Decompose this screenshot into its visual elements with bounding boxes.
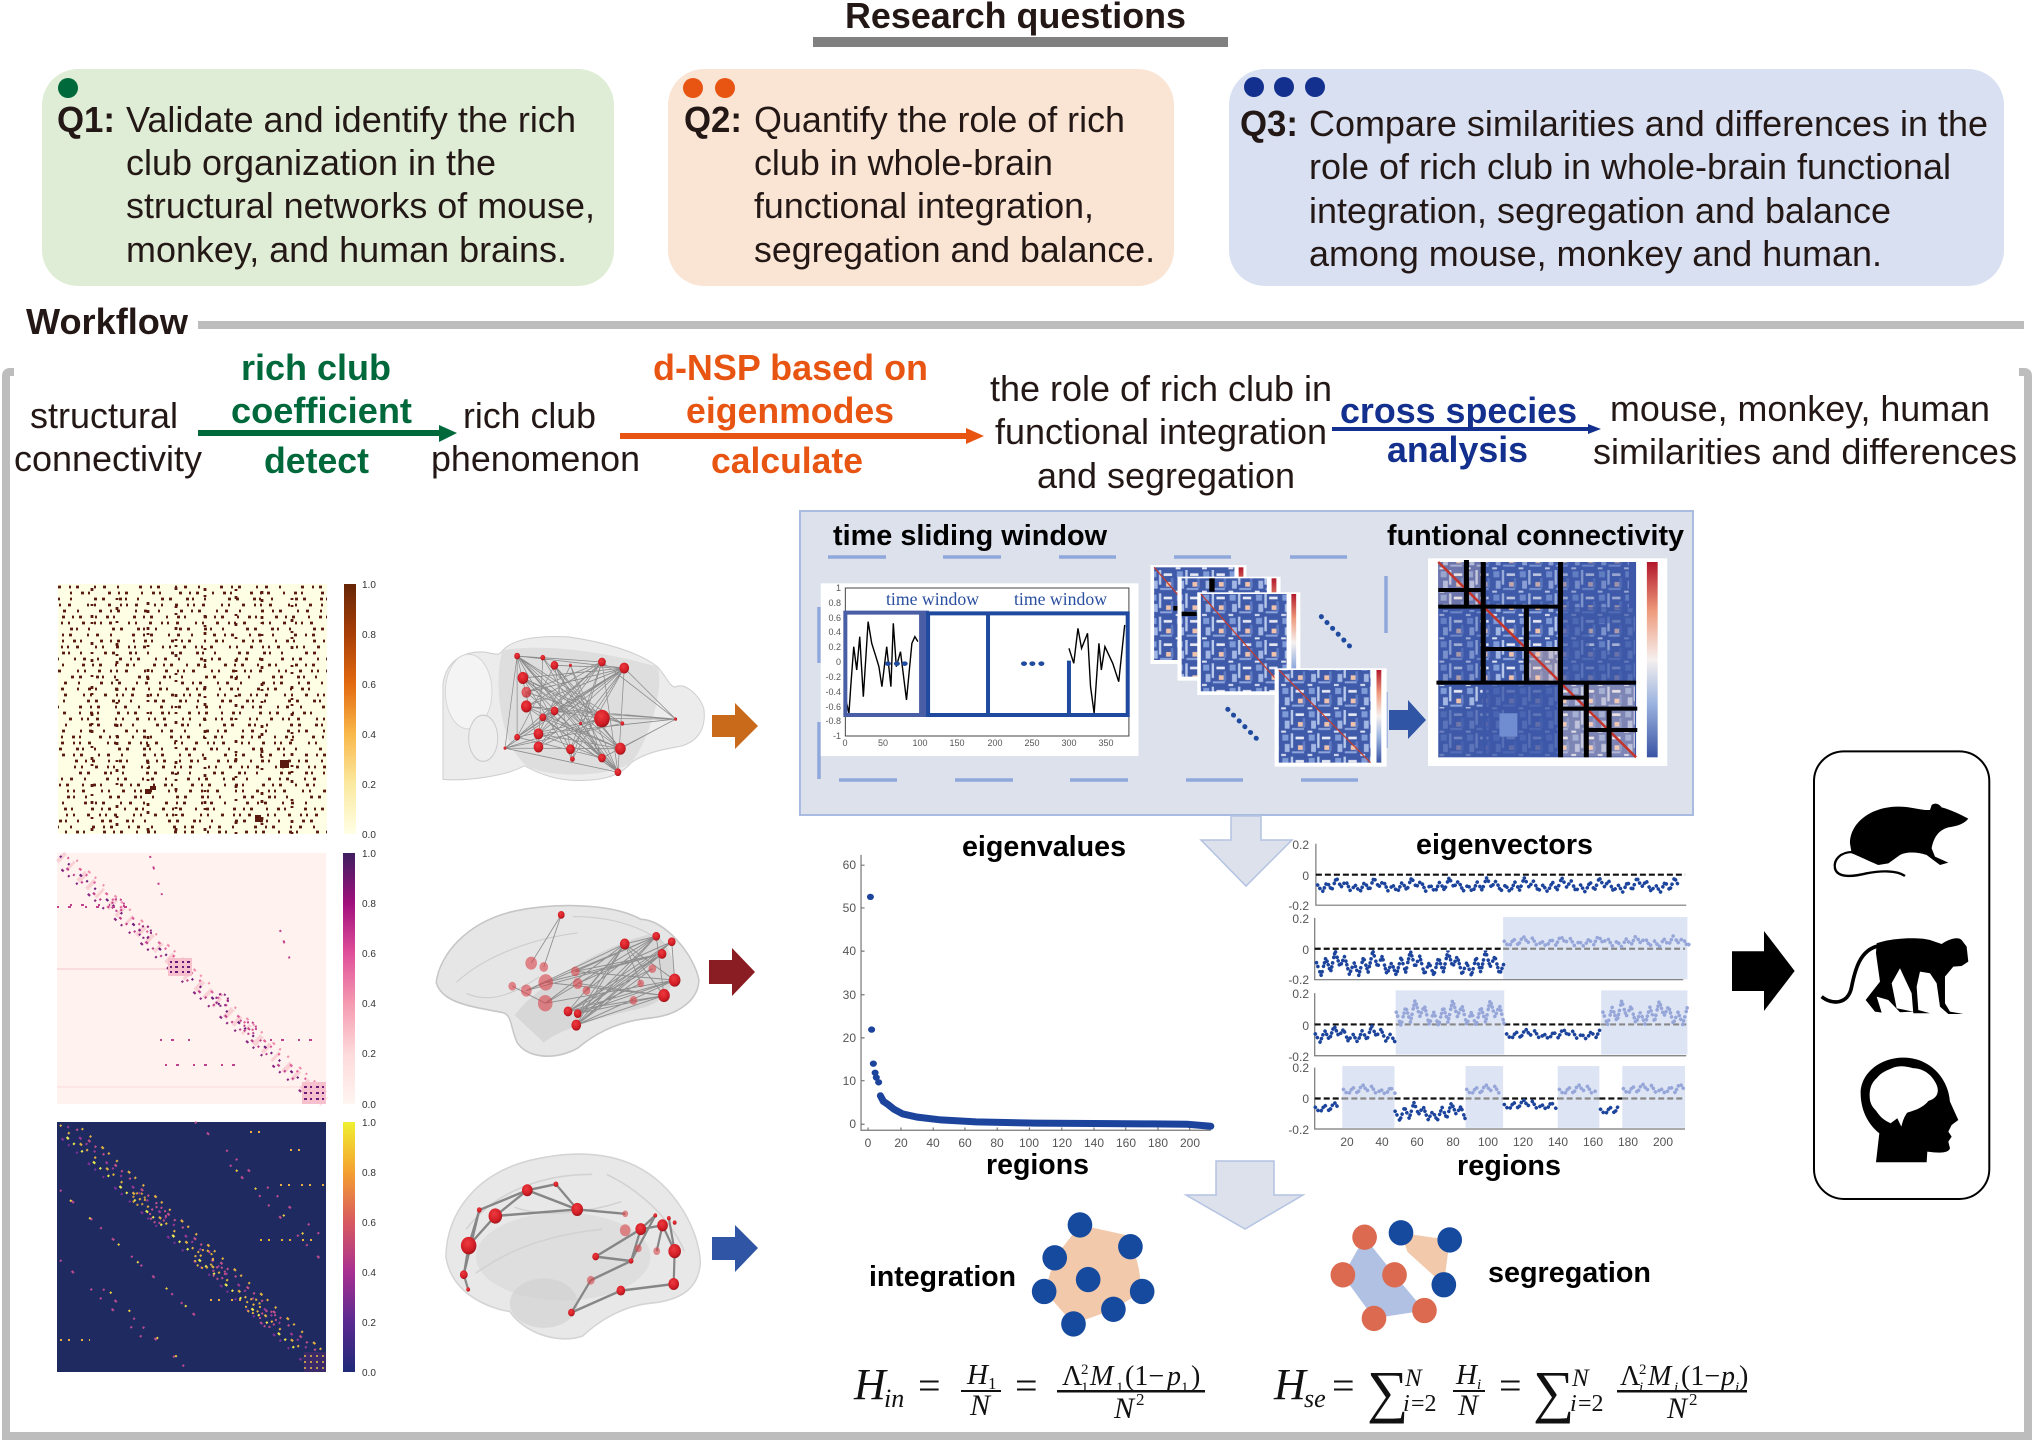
chart: eigenvalues: 100 xyxy=(1019,1136,1039,1150)
panel: Q2 xyxy=(668,69,1174,286)
diagram: integration xyxy=(869,1212,1154,1337)
panel: Q2: club in whole-brain xyxy=(754,142,1053,183)
formula: integration: M xyxy=(1089,1361,1115,1392)
chart: time series with windows: 0 xyxy=(842,738,848,748)
chart: eigenvectors: 40 xyxy=(1375,1135,1389,1149)
chart: time series with windows: 0.8 xyxy=(828,598,841,608)
chart: time series with windows: 150 xyxy=(949,738,965,748)
workflow step: similarities and differences xyxy=(1593,388,2017,472)
icon: monkey xyxy=(1822,938,1968,1014)
formula: segregation: =2 xyxy=(1411,1391,1437,1417)
chart: eigenvalues: 10 xyxy=(843,1074,856,1088)
workflow step: rich club phenomenon: rich club xyxy=(463,395,596,436)
chart: eigenvectors: -0.2 xyxy=(1288,973,1309,987)
formula: segregation: N xyxy=(1571,1365,1590,1392)
workflow step: role of rich club: the role of rich club in xyxy=(990,368,1332,409)
chart: eigenvectors: 0 xyxy=(1302,943,1309,957)
formula: integration: H xyxy=(853,1360,888,1409)
arrow: dark red xyxy=(709,948,755,996)
formula: segregation: = xyxy=(1499,1363,1522,1408)
formula: integration xyxy=(853,1359,1205,1425)
chart: time series with windows: 50 xyxy=(878,738,888,748)
formula: segregation: i xyxy=(1403,1391,1410,1417)
chart: eigenvectors: regions xyxy=(1457,1150,1561,1182)
panel: Q1 xyxy=(42,69,614,286)
formula: integration: 1 xyxy=(1081,1380,1088,1396)
chart: eigenvectors: -0.2 xyxy=(1288,1123,1309,1137)
formula: integration: H xyxy=(966,1359,990,1391)
formula: integration: (1− xyxy=(1125,1361,1164,1392)
chart: eigenvectors: 0.2 xyxy=(1292,912,1309,926)
chart: time series with windows: 0.6 xyxy=(828,613,841,623)
arrow: black to species xyxy=(1732,931,1795,1011)
heatmap: human structural connectivity: 0.6 xyxy=(362,1218,376,1229)
icon: human head with brain xyxy=(1861,1058,1958,1162)
chart: eigenvalues: 30 xyxy=(843,988,856,1002)
chart: eigenvalues: 0 xyxy=(849,1117,856,1131)
panel: Q2: Q2: xyxy=(684,99,742,140)
heading: functional connectivity: funtional connectivity xyxy=(1387,520,1684,552)
formula: integration: ) xyxy=(1191,1361,1200,1392)
heatmap: human structural connectivity: 0.4 xyxy=(362,1268,376,1279)
panel: Q3: integration, segregation and balance xyxy=(1309,190,1891,231)
chart: time series with windows: time window xyxy=(1014,589,1107,609)
heatmap: mouse structural connectivity: 0.8 xyxy=(362,630,376,641)
arrow: to functional connectivity xyxy=(1389,700,1426,739)
arrow: rich club coefficient detect: detect xyxy=(264,440,369,481)
chart: eigenvectors: 0 xyxy=(1302,1019,1309,1033)
brain: monkey network xyxy=(436,906,699,1056)
chart: eigenvalues: 0 xyxy=(865,1136,872,1150)
formula: integration: 2 xyxy=(1081,1362,1088,1378)
chart: eigenvalues: 180 xyxy=(1148,1136,1168,1150)
panel: Q1: structural networks of mouse, xyxy=(126,185,595,226)
arrow: cross species analysis: analysis xyxy=(1387,429,1528,470)
chart: eigenvalues: 160 xyxy=(1116,1136,1136,1150)
arrow: cross species analysis: cross species xyxy=(1340,390,1577,431)
panel: time sliding window and functional connectivity xyxy=(800,511,1693,815)
heatmap: mouse structural connectivity xyxy=(58,580,376,841)
formula: segregation: = xyxy=(1332,1363,1355,1408)
heatmap: monkey structural connectivity: 0.4 xyxy=(362,999,376,1010)
chart: eigenvectors xyxy=(1288,829,1692,1182)
workflow step: similarities and differences: similarities and differences xyxy=(1593,431,2017,472)
formula: segregation: i xyxy=(1477,1377,1481,1393)
chart: time series with windows: -0.4 xyxy=(825,687,841,697)
formula: integration: 1 xyxy=(1181,1380,1188,1396)
heatmap: human structural connectivity: 1.0 xyxy=(362,1118,376,1129)
formula: segregation: 2 xyxy=(1689,1390,1698,1409)
formula: integration: = xyxy=(918,1363,941,1408)
chart: eigenvectors: 20 xyxy=(1340,1135,1354,1149)
formula: segregation: ) xyxy=(1739,1361,1748,1392)
chart: time series with windows: 100 xyxy=(912,738,928,748)
chart: eigenvectors: 120 xyxy=(1513,1135,1533,1149)
chart: time series with windows: time window xyxy=(886,589,979,609)
chart: eigenvectors: eigenvectors xyxy=(1416,829,1593,861)
formula: segregation: M xyxy=(1647,1361,1673,1392)
formula: segregation: ∑ xyxy=(1533,1359,1574,1424)
formula: segregation: i xyxy=(1570,1391,1577,1417)
arrow: cross species analysis xyxy=(1332,390,1601,470)
chart: time series with windows: -0.6 xyxy=(825,702,841,712)
formula: segregation: =2 xyxy=(1578,1391,1604,1417)
title: research questions xyxy=(813,0,1228,47)
icon: mouse xyxy=(1835,804,1968,876)
arrow: down to integration and segregation xyxy=(1186,1161,1303,1229)
heatmap: mouse structural connectivity: 1.0 xyxy=(362,580,376,591)
formula: integration: 1 xyxy=(988,1374,996,1393)
chart: eigenvalues: 60 xyxy=(843,858,856,872)
formula: integration: 1 xyxy=(1116,1380,1124,1396)
chart: eigenvalues: eigenvalues xyxy=(962,831,1126,863)
workflow frame xyxy=(6,372,2028,1436)
arrow: rich club coefficient detect xyxy=(198,347,457,481)
chart: time series with windows: 0 xyxy=(836,657,841,667)
formula: segregation: N xyxy=(1457,1389,1480,1422)
formula: segregation: se xyxy=(1304,1384,1326,1413)
chart: time series with windows: 0.4 xyxy=(828,627,841,637)
arrow: d-NSP based on eigenmodes calculate xyxy=(620,347,984,481)
matrix: functional connectivity modules xyxy=(1428,558,1667,766)
chart: time series with windows: -0.8 xyxy=(825,716,841,726)
chart: time series with windows: 0.2 xyxy=(828,642,841,652)
heading: workflow: Workflow xyxy=(26,301,189,342)
workflow step: rich club phenomenon xyxy=(431,395,640,479)
chart: eigenvectors: 0.2 xyxy=(1292,838,1309,852)
chart: eigenvalues xyxy=(843,831,1211,1181)
formula: segregation: N xyxy=(1404,1365,1423,1392)
panel: Q3: Q3: xyxy=(1240,103,1298,144)
heatmap: monkey structural connectivity: 1.0 xyxy=(362,849,376,860)
heatmap: human structural connectivity xyxy=(57,1118,376,1379)
arrow: rich club coefficient detect: coefficient xyxy=(231,390,412,431)
arrow: orange xyxy=(712,703,758,749)
arrow: down to eigen decomposition xyxy=(1201,816,1292,886)
panel: Q1: club organization in the xyxy=(126,142,496,183)
chart: eigenvectors: 200 xyxy=(1653,1135,1673,1149)
arrow: d-NSP based on eigenmodes calculate: eigenmodes xyxy=(686,390,894,431)
workflow step: similarities and differences: mouse, monkey, human xyxy=(1610,388,1990,429)
heatmap: monkey structural connectivity: 0.8 xyxy=(362,899,376,910)
chart: eigenvectors: 0 xyxy=(1302,869,1309,883)
chart: eigenvalues: 20 xyxy=(894,1136,908,1150)
chart: eigenvalues: regions xyxy=(986,1149,1089,1181)
formula: segregation: i xyxy=(1674,1380,1678,1396)
chart: eigenvalues: 60 xyxy=(958,1136,972,1150)
heatmap: monkey structural connectivity: 0.0 xyxy=(362,1100,376,1111)
panel: Q2: functional integration, xyxy=(754,185,1094,226)
chart: eigenvalues: 40 xyxy=(843,944,856,958)
chart: eigenvalues: 40 xyxy=(926,1136,940,1150)
heading: time sliding window: time sliding window xyxy=(833,520,1107,552)
panel: Q2: Quantify the role of rich xyxy=(754,99,1125,140)
heatmap: human structural connectivity: 0.8 xyxy=(362,1168,376,1179)
brain: mouse network xyxy=(443,636,704,780)
brain: human network xyxy=(446,1154,700,1339)
chart: eigenvectors: 180 xyxy=(1618,1135,1638,1149)
chart: time series with windows: 1 xyxy=(836,583,841,593)
formula: segregation: (1− xyxy=(1681,1361,1720,1392)
heatmap: human structural connectivity: 0.0 xyxy=(362,1368,376,1379)
heading: workflow xyxy=(26,301,2024,342)
chart: time series with windows: -0.2 xyxy=(825,672,841,682)
workflow step: structural connectivity: connectivity xyxy=(14,438,202,479)
formula: segregation: Λ xyxy=(1620,1361,1641,1392)
panel: Q3: among mouse, monkey and human. xyxy=(1309,233,1882,274)
chart: eigenvectors: 0 xyxy=(1302,1092,1309,1106)
formula: integration: = xyxy=(1015,1363,1038,1408)
formula: integration: 2 xyxy=(1136,1390,1144,1409)
arrow: blue xyxy=(712,1225,758,1272)
chart: eigenvalues: 50 xyxy=(843,901,856,915)
dashed frame around time window xyxy=(819,557,1386,780)
panel: Q3: Compare similarities and differences in the xyxy=(1309,103,1988,144)
arrow: d-NSP based on eigenmodes calculate: calculate xyxy=(711,440,863,481)
heatmap: mouse structural connectivity: 0.2 xyxy=(362,780,376,791)
heatmap: mouse structural connectivity: 0.0 xyxy=(362,830,376,841)
chart: time series with windows: 250 xyxy=(1024,738,1040,748)
panel: Q1: Q1: xyxy=(57,99,115,140)
formula: segregation: i xyxy=(1735,1380,1739,1396)
chart: eigenvectors: 140 xyxy=(1548,1135,1568,1149)
chart: eigenvectors: 160 xyxy=(1583,1135,1603,1149)
formula: integration: N xyxy=(1113,1392,1136,1425)
chart: eigenvalues: 140 xyxy=(1084,1136,1104,1150)
formula: segregation: ∑ xyxy=(1367,1359,1408,1424)
formula: segregation: H xyxy=(1273,1360,1308,1409)
heatmap: mouse structural connectivity: 0.4 xyxy=(362,730,376,741)
arrow: d-NSP based on eigenmodes calculate: d-NSP based on xyxy=(653,347,928,388)
chart: eigenvectors: 0.2 xyxy=(1292,987,1309,1001)
chart: eigenvalues: 20 xyxy=(843,1031,856,1045)
formula: segregation: p xyxy=(1719,1361,1735,1392)
panel: Q1: Validate and identify the rich xyxy=(126,99,576,140)
panel: species icons xyxy=(1814,751,1989,1199)
heatmap: monkey structural connectivity: 0.6 xyxy=(362,949,376,960)
formula: segregation: N xyxy=(1666,1392,1689,1425)
formula: segregation: 2 xyxy=(1639,1362,1646,1378)
chart: eigenvectors: -0.2 xyxy=(1288,899,1309,913)
formula: segregation: H xyxy=(1455,1359,1479,1391)
chart: time series with windows: 200 xyxy=(987,738,1003,748)
chart: time series with windows: -1 xyxy=(833,731,841,741)
heatmap: mouse structural connectivity: 0.6 xyxy=(362,680,376,691)
heatmap: monkey structural connectivity: 0.2 xyxy=(362,1049,376,1060)
heatmap: monkey structural connectivity xyxy=(57,849,376,1111)
chart: eigenvectors: -0.2 xyxy=(1288,1050,1309,1064)
panel: Q3 xyxy=(1229,69,2004,286)
chart: time series with windows: 350 xyxy=(1098,738,1114,748)
chart: eigenvectors: 60 xyxy=(1410,1135,1424,1149)
chart: time series with windows: 300 xyxy=(1061,738,1077,748)
chart: eigenvalues: 80 xyxy=(990,1136,1004,1150)
arrow: rich club coefficient detect: rich club xyxy=(241,347,391,388)
diagram: integration: integration xyxy=(869,1261,1016,1293)
chart: eigenvectors: 0.2 xyxy=(1292,1061,1309,1075)
chart: eigenvectors: 100 xyxy=(1478,1135,1498,1149)
panel: Q3: role of rich club in whole-brain functional xyxy=(1309,146,1951,187)
workflow step: role of rich club: functional integration xyxy=(995,411,1327,452)
workflow step: role of rich club xyxy=(990,368,1332,496)
formula: segregation xyxy=(1273,1359,1748,1425)
formula: integration: Λ xyxy=(1062,1361,1083,1392)
chart: eigenvalues: 120 xyxy=(1052,1136,1072,1150)
stacked connectivity matrices xyxy=(1150,565,1387,767)
panel: Q1: monkey, and human brains. xyxy=(126,229,567,270)
formula: integration: in xyxy=(884,1384,904,1413)
chart: time series with windows xyxy=(821,583,1139,756)
workflow step: role of rich club: and segregation xyxy=(1037,455,1295,496)
formula: segregation: i xyxy=(1639,1380,1643,1396)
formula: integration: N xyxy=(969,1389,992,1422)
formula: integration: p xyxy=(1165,1361,1181,1392)
chart: eigenvalues: 200 xyxy=(1180,1136,1200,1150)
diagram: segregation: segregation xyxy=(1488,1257,1651,1289)
diagram: segregation xyxy=(1331,1220,1651,1331)
panel: Q2: segregation and balance. xyxy=(754,229,1155,270)
chart: eigenvectors: 80 xyxy=(1446,1135,1460,1149)
workflow step: rich club phenomenon: phenomenon xyxy=(431,438,640,479)
heatmap: human structural connectivity: 0.2 xyxy=(362,1318,376,1329)
workflow step: structural connectivity: structural xyxy=(30,395,178,436)
workflow step: structural connectivity xyxy=(14,395,202,479)
